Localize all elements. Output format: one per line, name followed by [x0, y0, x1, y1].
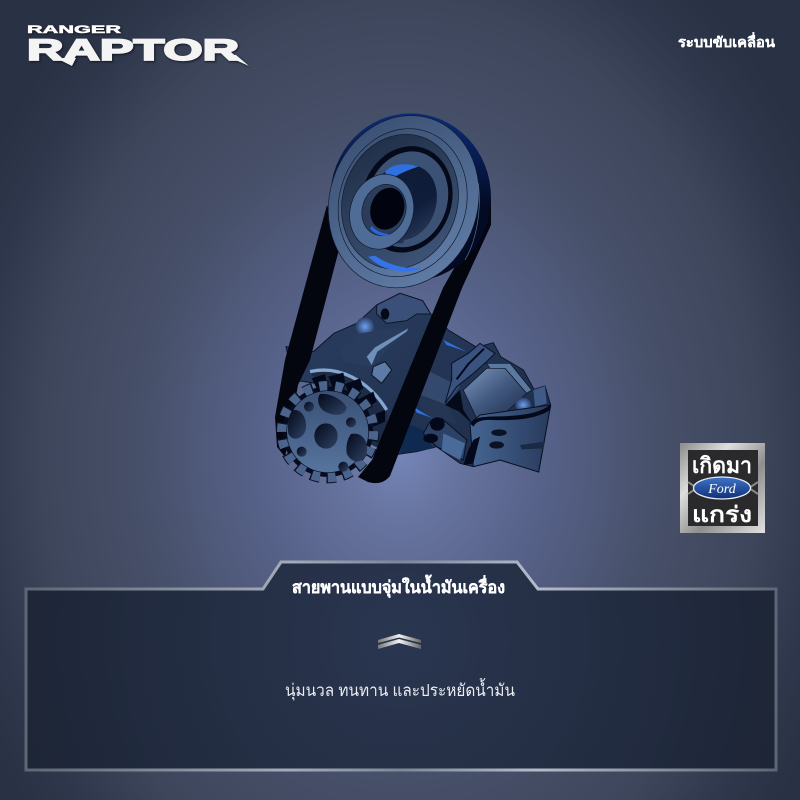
- section label: drivetrain: ระบบขับเคลื่อน: [678, 32, 775, 50]
- logo: Ranger Raptor: [27, 24, 249, 67]
- drive belt: left strand: [275, 205, 341, 457]
- badge: Ford: แกร่ง: [692, 502, 752, 527]
- logo: Ranger Raptor: RANGER: [27, 24, 121, 36]
- badge: Ford: [680, 443, 765, 533]
- pump sprocket: [282, 386, 374, 478]
- panel text: นุ่มนวล ทนทาน และประหยัดน้ำมัน: [285, 678, 515, 701]
- badge: Ford: Ford: [707, 482, 737, 497]
- chevron icon: [378, 634, 421, 649]
- panel heading: สายพานแบบจุ่มในน้ำมันเครื่อง: [292, 574, 505, 598]
- badge: Ford: เกิดมา: [692, 453, 752, 478]
- info panel: [26, 562, 776, 770]
- drive belt: right strand: [358, 195, 491, 483]
- logo: Ranger Raptor: RAPTOR: [27, 34, 240, 67]
- illustration: belt and oil pump: [275, 96, 551, 483]
- oil pump body: [286, 293, 551, 472]
- sprocket rear drum: [310, 370, 389, 453]
- crank pulley: [306, 96, 501, 308]
